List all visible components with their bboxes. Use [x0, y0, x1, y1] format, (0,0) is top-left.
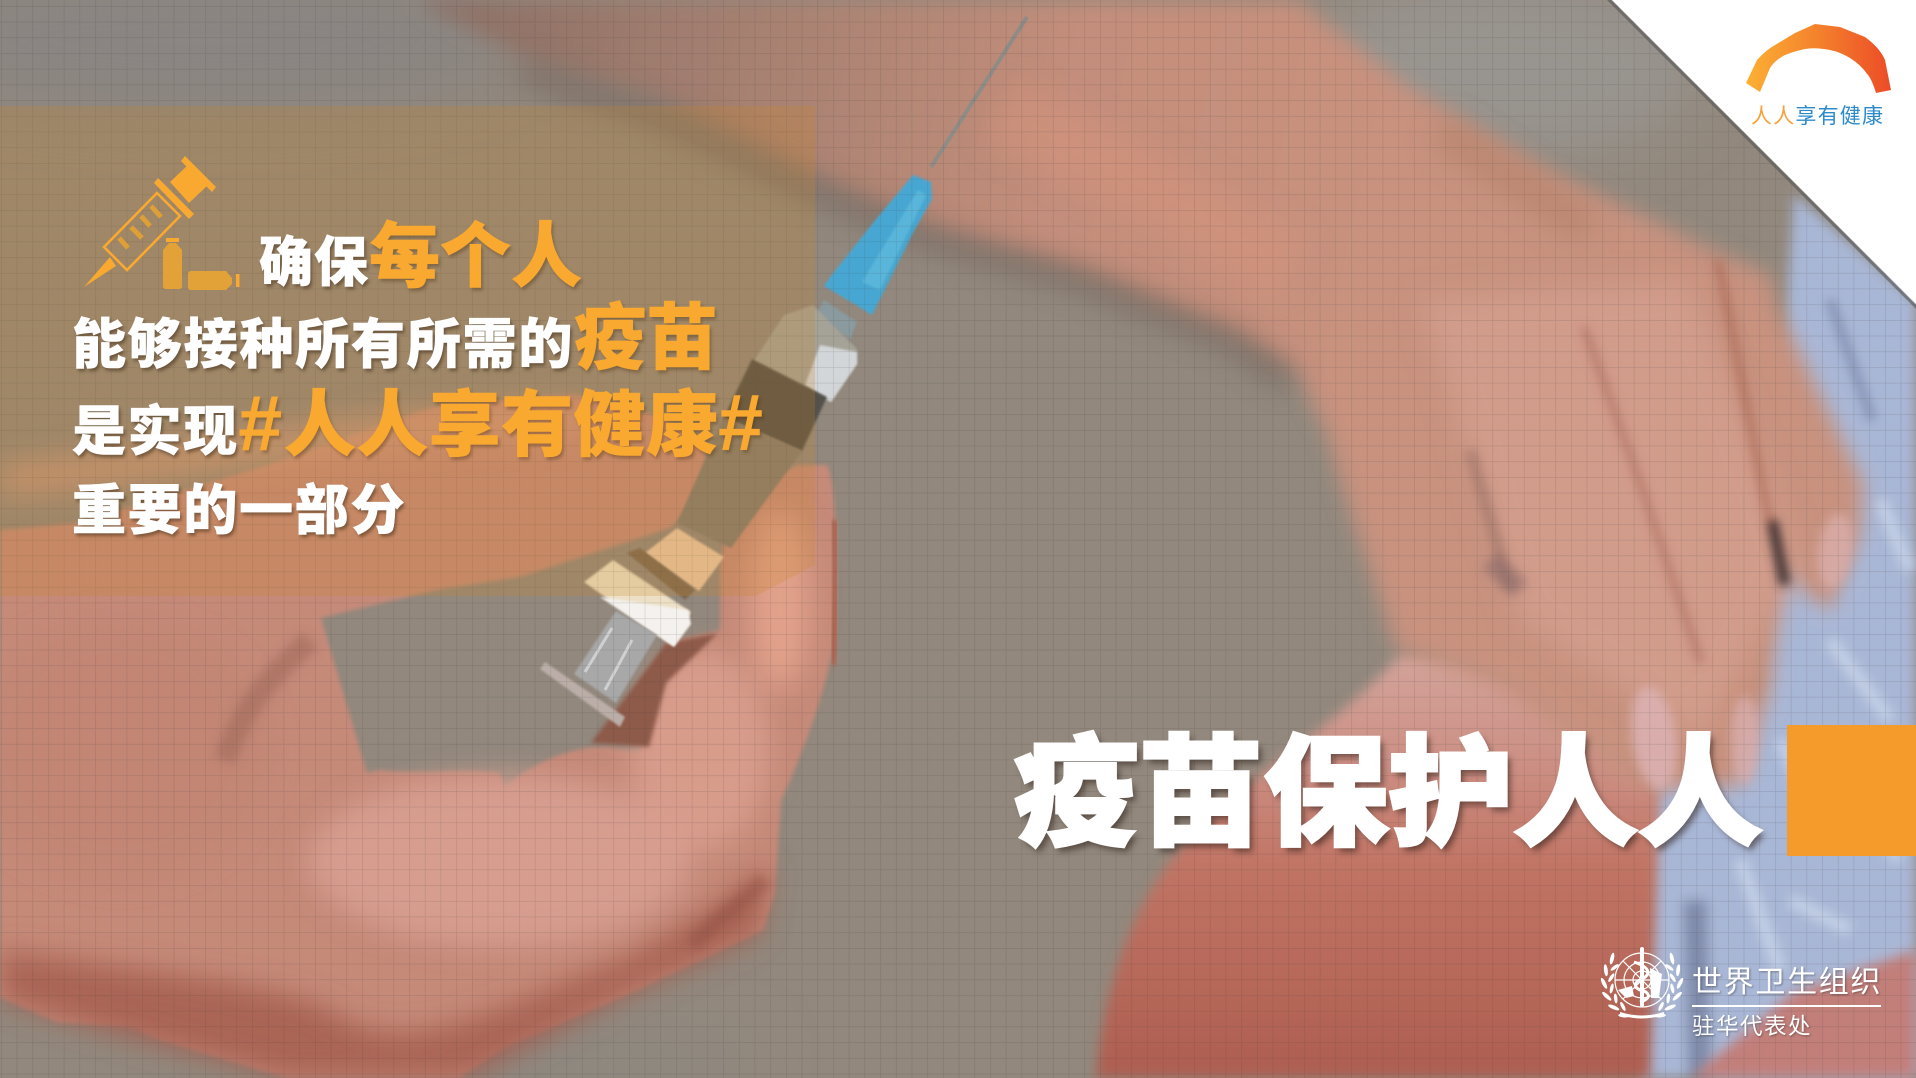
line 4: 重要的一部分 — [72, 481, 406, 541]
main title: 疫苗保护人人 — [1014, 727, 1763, 861]
baby leg — [1096, 655, 1916, 1078]
WHO logo block — [1600, 947, 1882, 1039]
arm shadow — [520, 70, 1290, 380]
orange accent block — [1787, 725, 1916, 856]
text panel background — [0, 106, 815, 596]
white corner with logo — [1607, 0, 1916, 309]
fingers — [1470, 260, 1857, 793]
logo text: 人人享有健康 — [1751, 105, 1884, 128]
icon: syringe and vials — [84, 156, 240, 290]
hand shading — [0, 420, 810, 1078]
line 2: 能够接种所有所需的疫苗 — [72, 299, 718, 379]
divider — [1692, 1005, 1881, 1007]
line 3: 是实现#人人享有健康# — [72, 378, 763, 467]
organisation name: 世界卫生组织 — [1692, 966, 1882, 999]
hand creases — [225, 520, 836, 945]
logo arc — [1746, 24, 1891, 93]
cloth pattern — [1740, 300, 1910, 970]
callout text — [72, 218, 764, 541]
line 1: 确保每个人 — [259, 218, 582, 297]
left hand holding syringe — [0, 395, 836, 1078]
office name: 驻华代表处 — [1692, 1014, 1812, 1039]
upper arm and adult hand — [415, 0, 1864, 790]
icon: WHO emblem — [1600, 947, 1684, 1018]
syringe — [540, 17, 1027, 727]
blue cloth — [1640, 194, 1916, 1078]
